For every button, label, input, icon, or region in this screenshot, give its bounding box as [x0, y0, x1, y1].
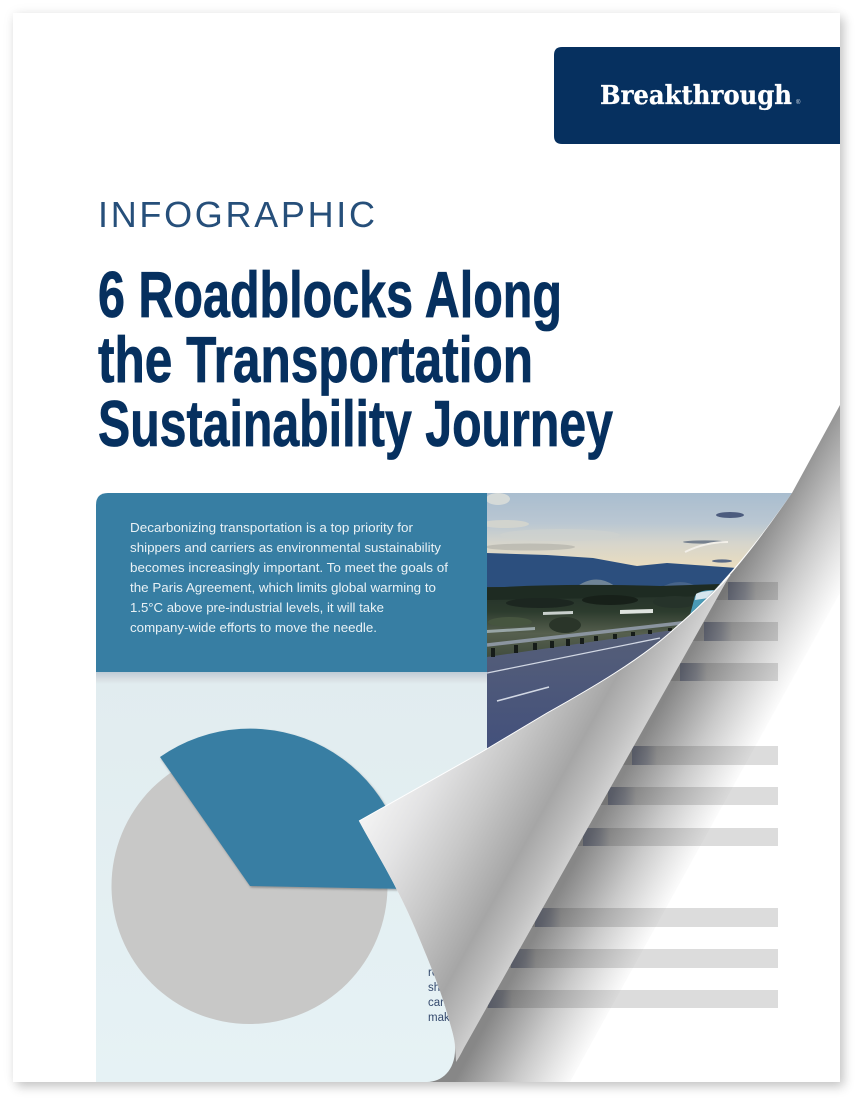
logo registered mark: ® — [796, 99, 801, 106]
intro text: becomes increasingly important. To meet the goals of — [130, 560, 448, 575]
curl shadow cast on the page — [427, 405, 840, 1082]
pie slice: teal wedge — [160, 729, 407, 889]
curled page flap — [359, 575, 730, 1062]
photo: highway at dusk — [487, 493, 792, 748]
main content panel, clipped by the page curl — [96, 493, 847, 1082]
intro text: 1.5°C above pre-industrial levels, it will take — [130, 600, 384, 615]
guardrail — [487, 622, 690, 657]
kicker: infographic: INFOGRAPHIC — [98, 194, 375, 235]
truck — [690, 590, 714, 614]
pale blue lower panel — [96, 672, 516, 1082]
title: 6 Roadblocks Along — [98, 258, 562, 331]
logo wordmark: Breakthrough — [600, 81, 792, 111]
bluish bar ends seen through the shadow — [488, 582, 756, 1008]
lower body text partly hidden by the curl: carriers — [428, 997, 467, 1009]
logo badge — [554, 47, 840, 144]
intro text: company-wide efforts to move the needle. — [130, 620, 377, 635]
lower body text partly hidden by the curl: reduce — [428, 967, 463, 979]
title: the Transportation — [98, 323, 533, 396]
intro text: the Paris Agreement, which limits global warming to — [130, 580, 436, 595]
road — [487, 630, 671, 748]
vegetation — [487, 584, 720, 657]
intro text — [130, 520, 448, 635]
placeholder text bars on the page beneath the curl — [450, 582, 778, 1008]
intro text: shippers and carriers as environmental sustainability — [130, 540, 442, 555]
intro band — [96, 493, 487, 672]
mountains — [487, 553, 734, 593]
lane markings — [487, 638, 660, 701]
title: Sustainability Journey — [98, 387, 613, 460]
lower body text partly hidden by the curl: make — [428, 1012, 456, 1024]
title — [98, 258, 613, 460]
pie chart — [112, 729, 407, 1024]
flap highlight edge — [359, 575, 730, 821]
intro text: Decarbonizing transportation is a top priority for — [130, 520, 414, 535]
pie base: grey circle — [112, 748, 388, 1024]
lower body text partly hidden by the curl — [428, 970, 450, 1021]
shadow beneath teal band — [96, 672, 487, 681]
lower body text partly hidden by the curl: shippers — [428, 982, 472, 994]
